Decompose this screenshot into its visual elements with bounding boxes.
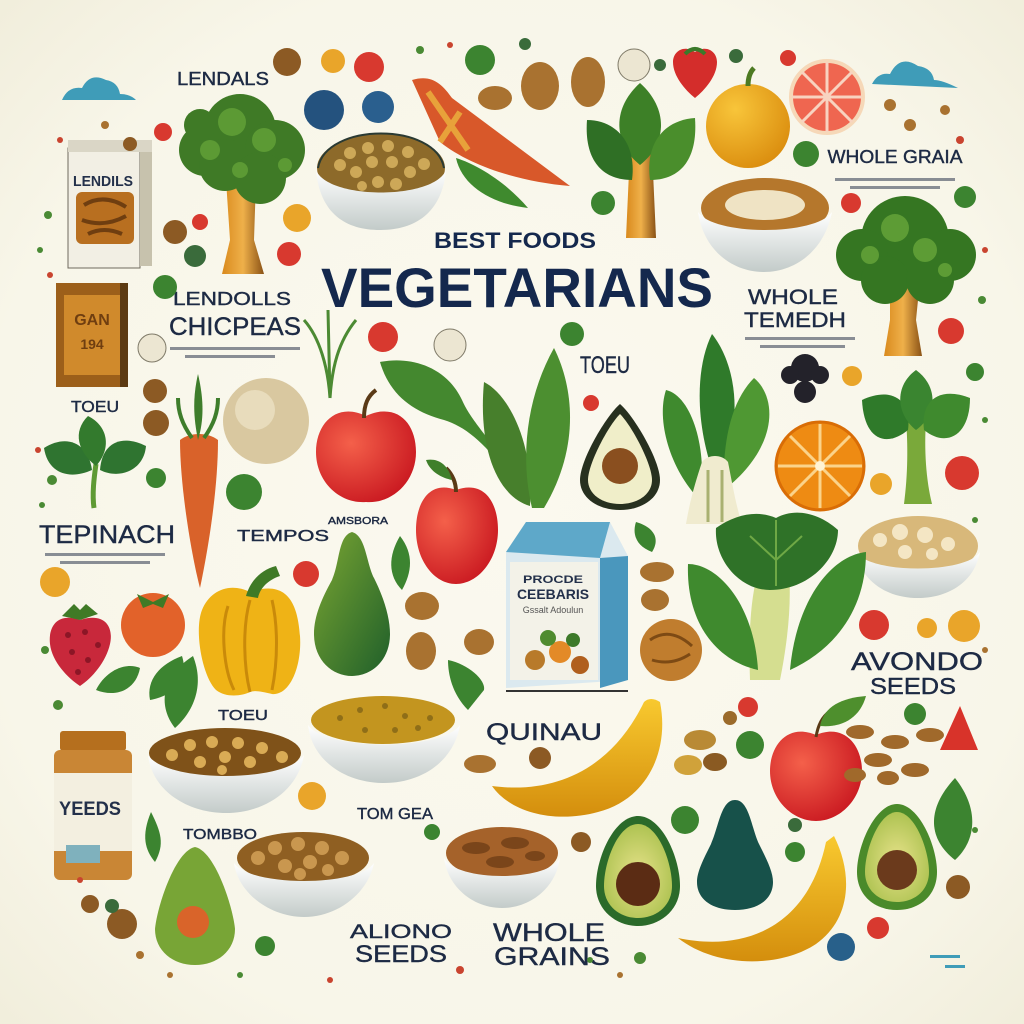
- icon: spinach right: [862, 370, 970, 504]
- icon: spinach left: [44, 416, 146, 508]
- icon: dark avocado: [697, 800, 773, 910]
- food labels: TEMEDH: [744, 309, 846, 332]
- icon: nuts right: [844, 725, 944, 785]
- food labels: AMSBORA: [328, 516, 388, 527]
- icon: nut cluster: [674, 711, 737, 775]
- bowl: beans left: [148, 728, 304, 813]
- bowl: yellow lentils: [308, 696, 460, 783]
- icon: tomato: [121, 593, 185, 657]
- icon: avocado half right: [857, 804, 937, 910]
- icon: carrot upright: [178, 374, 218, 588]
- food labels: CHICPEAS: [169, 313, 301, 341]
- food labels: SEEDS: [870, 673, 956, 699]
- icon: pepper: [199, 566, 300, 696]
- food labels: LENDALS: [177, 69, 269, 89]
- icon: banana centre: [492, 699, 662, 817]
- food labels: TEMPOS: [237, 528, 329, 545]
- icon: blackberry: [781, 354, 829, 403]
- icon: apple right: [770, 696, 866, 821]
- icon: tofu round: [223, 378, 309, 464]
- icon: milk carton: CEEBARIS: [517, 586, 589, 602]
- food labels: TOMBBO: [183, 826, 257, 843]
- food labels: TOEU: [218, 707, 268, 724]
- icon: nuts centre: [405, 57, 674, 773]
- icon: seeds jar: YEEDS: [59, 799, 121, 820]
- food labels: LENDOLLS: [173, 289, 291, 309]
- bowl: grains right: [698, 178, 832, 272]
- icon: big greens: [688, 513, 866, 680]
- icon: half avocado centre: [580, 404, 660, 510]
- icon: milk carton: Gssalt Adoulun: [523, 605, 583, 615]
- food labels: WHOLE: [748, 286, 838, 309]
- icon: strawberry top: [673, 49, 717, 98]
- icon: spinach centre: [380, 348, 570, 508]
- clouds: [62, 62, 958, 100]
- food labels: AVONDO: [851, 648, 983, 676]
- icon: brown package: [56, 283, 128, 387]
- icon: seeds jar: [54, 731, 132, 880]
- icon: milk carton: [506, 522, 628, 692]
- icon: broccoli tree top left: [179, 94, 305, 274]
- icon: grapefruit slice: [791, 61, 863, 133]
- food labels: SEEDS: [355, 941, 447, 968]
- food labels: TEPINACH: [39, 521, 175, 549]
- bowl: walnuts: [234, 832, 374, 917]
- icon: broccoli tree right: [836, 196, 976, 356]
- icon: pear avocado: [314, 532, 390, 676]
- icon: strawberry left: [50, 604, 111, 686]
- icon: carrot diagonal: [412, 78, 570, 208]
- icon: brown package: 194: [80, 336, 104, 352]
- food labels: TOEU: [580, 352, 630, 379]
- icon: orange slice: [776, 422, 864, 510]
- heading: vegetarians: VEGETARIANS: [321, 256, 713, 319]
- bowl: chickpeas: [316, 134, 446, 230]
- food labels: TOM GEA: [357, 806, 433, 823]
- icon: milk carton: PROCDE: [523, 574, 583, 586]
- food labels: TOEU: [71, 399, 119, 416]
- icon: lentils package: LENDILS: [73, 173, 133, 190]
- food labels: QUINAU: [486, 719, 602, 746]
- tiny caption strokes: [45, 178, 955, 564]
- icon: brown package: GAN: [74, 312, 110, 329]
- icon: red triangle: [940, 706, 978, 750]
- food labels: WHOLE GRAIA: [828, 147, 962, 167]
- icon: avocado half bottom: [596, 816, 680, 926]
- icon: walnut round: [640, 619, 702, 681]
- food labels: WHOLE: [493, 919, 605, 947]
- icon: yellow fruit: [706, 68, 790, 168]
- food labels: GRAINS: [494, 943, 610, 971]
- icon: herb sprig: [304, 310, 356, 398]
- icon: avocado bottom left: [155, 847, 235, 965]
- bowl: oats: [856, 516, 980, 598]
- icon: apple lower: [416, 460, 498, 584]
- icon: lentils package: [68, 140, 152, 268]
- icon: bok choy: [663, 334, 769, 524]
- title block: [321, 228, 713, 319]
- food labels: ALIONO: [350, 922, 452, 943]
- icon: apple centre: [316, 390, 416, 502]
- icon: banana right: [678, 836, 846, 961]
- bowl: almonds: [444, 827, 560, 908]
- icon: blueberries: [304, 90, 394, 130]
- icon: loose leaves: [96, 45, 984, 956]
- icon: leaf tree: [587, 83, 695, 238]
- heading: best foods: BEST FOODS: [434, 228, 596, 253]
